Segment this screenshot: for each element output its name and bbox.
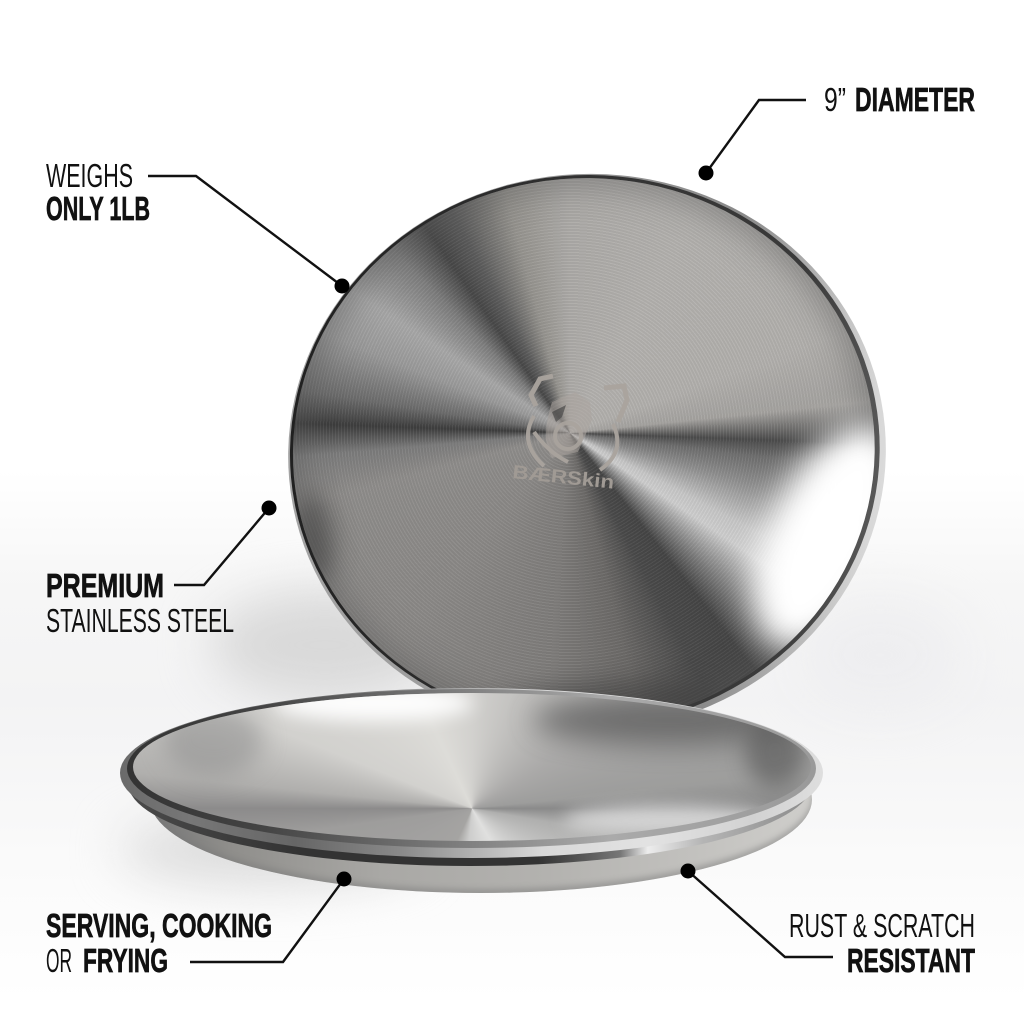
- callout: weighs only 1lb: [46, 157, 350, 294]
- engraved bear logo: BÆRSkin: [511, 462, 615, 494]
- left wall shade: [163, 705, 263, 775]
- callout: premium stainless steel: PREMIUM: [46, 567, 164, 604]
- callout: weighs only 1lb: ONLY 1LB: [46, 190, 150, 227]
- upright steel plate: [288, 174, 886, 709]
- lower rim: [128, 700, 812, 866]
- left wall dark spot: [291, 491, 337, 584]
- upper rim: [120, 688, 823, 858]
- plate inner groove: [267, 151, 903, 752]
- dark logo eye patch: [552, 405, 566, 422]
- plate dish: [133, 693, 811, 841]
- dish wall shading: [266, 150, 902, 753]
- rim groove: [127, 689, 816, 848]
- brushed plate dish: [270, 154, 898, 749]
- callout: premium stainless steel: [46, 500, 276, 639]
- callout: serving, cooking or frying: [46, 872, 352, 979]
- brushed texture: [270, 154, 898, 749]
- lying steel plate: [120, 688, 823, 893]
- callout: weighs only 1lb: WEIGHS: [46, 157, 133, 194]
- underside of plate: [150, 706, 812, 893]
- callout: serving, cooking or frying: FRYING: [83, 942, 168, 979]
- right wall shade: [745, 717, 805, 787]
- callout: premium stainless steel: STAINLESS STEEL: [46, 602, 234, 639]
- engraved bear logo: [511, 374, 629, 494]
- lower wall shade: [484, 673, 717, 743]
- lower right white glare: [724, 401, 934, 669]
- callout: 9 inch diameter: DIAMETER: [855, 81, 975, 118]
- callout: rust and scratch resistant: [680, 864, 975, 979]
- upper-left highlight: [273, 685, 473, 721]
- upper-right dark wall: [533, 695, 803, 745]
- callout: 9 inch diameter: [698, 81, 975, 180]
- plate outer rim: [265, 149, 909, 757]
- callout: serving, cooking or frying: SERVING, COOKING: [46, 907, 272, 944]
- callout: serving, cooking or frying: OR: [46, 942, 72, 979]
- lower-right light sweep: [563, 805, 773, 835]
- callout: 9 inch diameter: 9”: [824, 81, 846, 118]
